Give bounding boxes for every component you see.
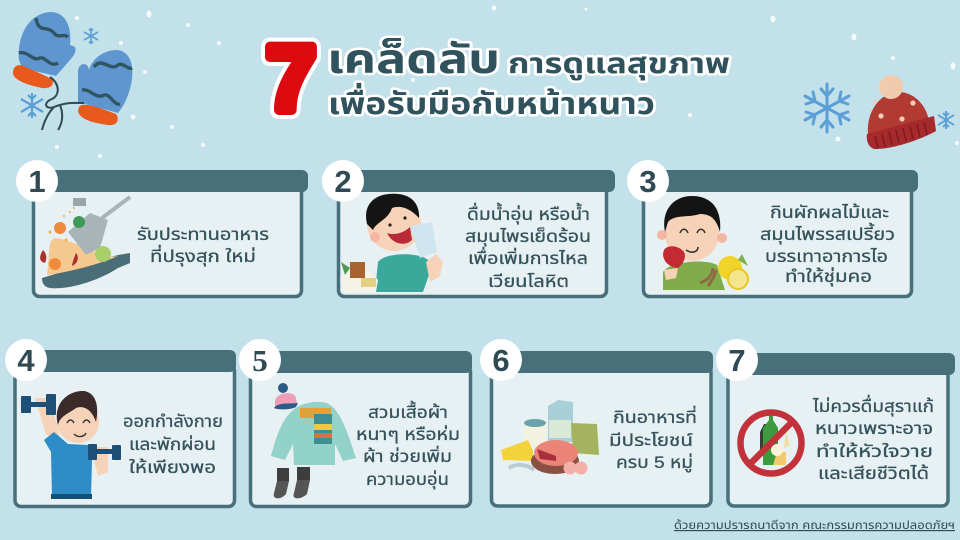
- tip 3 text: ทำให้ชุ่มคอ: [785, 266, 872, 287]
- number 1: [16, 160, 58, 202]
- number 4: [5, 339, 47, 381]
- icon: boy with dumbbells: [21, 391, 121, 499]
- panel: tip 3: [627, 160, 918, 296]
- tip 7 text: ไม่ควรดื่มสุราแก้: [812, 394, 934, 417]
- tip 3 text: สมุนไพรรสเปรี้ยว: [760, 222, 895, 245]
- tip 6 text: ครบ 5 หมู่: [616, 453, 693, 474]
- number 5: [239, 339, 281, 381]
- number 6: [480, 339, 522, 381]
- tip 2 text: เวียนโลหิต: [488, 272, 569, 291]
- title line 2: เพื่อรับมือกับหน้าหนาว: [328, 82, 655, 121]
- tip 1 text: ที่ปรุงสุก ใหม่: [150, 244, 256, 267]
- title: [266, 28, 730, 130]
- number 7: 7: [728, 343, 746, 378]
- tip 4 text: และพักผ่อน: [129, 435, 216, 454]
- tip 5 text: สวมเสื้อผ้า: [368, 400, 448, 422]
- icon: mittens: [13, 12, 132, 130]
- title line 1 right: การดูแลสุขภาพ: [508, 48, 730, 81]
- number 7: [716, 339, 758, 381]
- title numeral fill: 7: [266, 28, 316, 130]
- tip 3 text: [760, 202, 895, 287]
- tip 3 text: บรรเทาอาการไอ: [765, 247, 888, 266]
- tip 5 text: ความอบอุ่น: [366, 470, 449, 490]
- tip 5 text: หนาๆ หรือห่ม: [356, 425, 460, 444]
- number 3: [627, 160, 669, 202]
- tip 6 text: มีประโยชน์: [609, 431, 693, 450]
- tip 4 text: ให้เพียงพอ: [129, 457, 216, 477]
- tip 2 text: ดื่มน้ำอุ่น หรือน้ำ: [467, 202, 590, 225]
- icon: snowflake small top-left: [84, 28, 98, 44]
- panel: tip 6: [480, 339, 713, 506]
- icon: winter hat: [867, 75, 936, 149]
- tip 7 text: หนาวเพราะอาจ: [815, 419, 933, 438]
- tip 6 text: กินอาหารที่: [613, 405, 697, 427]
- number 2: [322, 160, 364, 202]
- number 1: 1: [28, 164, 46, 199]
- icon: snowflake bottom-left: [21, 93, 43, 118]
- number 4: 4: [17, 343, 35, 378]
- tip 1 text: [137, 225, 269, 267]
- icon: frying pan: [40, 197, 130, 288]
- number 6: 6: [492, 343, 510, 378]
- number 2: 2: [334, 164, 352, 199]
- icon: snowflake large right: [805, 84, 849, 132]
- tip 1 text: รับประทานอาหาร: [137, 225, 269, 244]
- icon: no alcohol sign: [740, 412, 802, 474]
- icon: boy eating fruit: [657, 196, 748, 290]
- tip 3 text: กินผักผลไม้และ: [770, 202, 889, 222]
- icon: winter clothes: [271, 383, 356, 498]
- icon: snowflake small right: [938, 111, 954, 129]
- title line 1: เคล็ดลับ: [327, 36, 500, 82]
- footer credit: ด้วยความปรารถนาดีจาก คณะกรรมการความปลอดภัยฯ: [674, 518, 955, 532]
- tip 7 text: [812, 394, 934, 483]
- tip 5 text: ผ้า ช่วยเพิ่ม: [363, 445, 452, 466]
- tip 7 text: ทำให้หัวใจวาย: [816, 441, 933, 461]
- title numeral 7: 7: [266, 28, 316, 130]
- panel: tip 1: [16, 160, 308, 296]
- icon: food groups: [501, 400, 599, 474]
- number 3: 3: [639, 164, 657, 199]
- number 5: 5: [252, 343, 268, 378]
- tip 7 text: และเสียชีวิตได้: [818, 463, 929, 483]
- panel: tip 5: [239, 339, 472, 506]
- tip 4 text: [123, 412, 223, 477]
- tip 2 text: สมุนไพรเย็ดร้อน: [465, 226, 591, 247]
- panel: tip 4: [5, 339, 236, 506]
- icon: boy drinking: [340, 194, 443, 292]
- tip 5 text: [356, 400, 460, 490]
- tip 4 text: ออกกำลังกาย: [123, 412, 223, 431]
- tip 2 text: [465, 202, 591, 291]
- tip 6 text: [609, 405, 697, 474]
- panel: tip 7: [716, 339, 955, 506]
- tip 2 text: เพื่อเพิ่มการไหล: [468, 246, 588, 268]
- panel: tip 2: [322, 160, 615, 296]
